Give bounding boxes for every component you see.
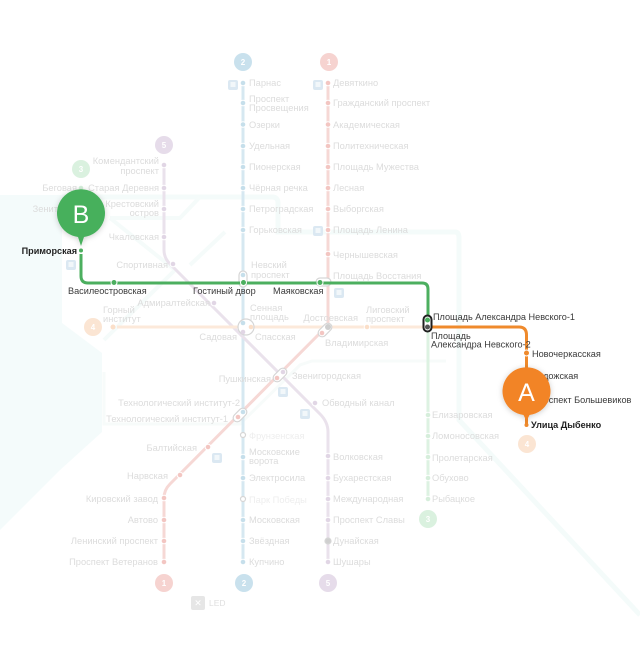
faded station labels: Чёрная речка [249, 183, 309, 193]
active station labels: Александра Невского-2 [431, 340, 531, 350]
faded station labels: Академическая [333, 120, 400, 130]
line number badges: 2 [242, 579, 247, 588]
faded station labels: Девяткино [333, 78, 378, 88]
faded station labels: Московские [249, 447, 300, 457]
faded station labels: Политехническая [333, 141, 409, 151]
faded station labels: Технологический институт-1 [106, 414, 228, 424]
faded station labels: Проспект [249, 94, 290, 104]
faded station labels: Выборгская [333, 204, 384, 214]
faded station labels: Московская [249, 515, 300, 525]
active station labels: Площадь Александра Невского-1 [433, 312, 575, 322]
line number badges [72, 53, 536, 592]
active station labels: Гостиный двор [193, 286, 256, 296]
active station labels: Проспект Большевиков [532, 395, 632, 405]
faded station labels: Нарвская [127, 471, 168, 481]
faded station labels: Адмиралтейская [137, 298, 210, 308]
faded station labels: Кировский завод [86, 494, 159, 504]
faded station labels: остров [130, 208, 159, 218]
active station labels: Ладожская [532, 371, 578, 381]
line 1 (red) [161, 80, 331, 565]
faded station labels: Обводный канал [322, 398, 395, 408]
faded station labels: Звёздная [249, 536, 290, 546]
faded station labels: Обухово [432, 473, 469, 483]
faded station labels: Лесная [333, 183, 364, 193]
route segment: orange [428, 327, 526, 425]
faded station labels: Площадь Восстания [333, 271, 421, 281]
faded station labels: площадь [250, 312, 289, 322]
active station labels: Площадь [431, 331, 471, 341]
faded station labels: Просвещения [249, 103, 309, 113]
active stations: dots [79, 248, 530, 427]
faded station labels: Удельная [249, 141, 290, 151]
faded station labels: Пионерская [249, 162, 301, 172]
background: water and rivers [0, 195, 640, 615]
line number badges: 4 [91, 323, 96, 332]
line number badges: 2 [241, 58, 246, 67]
line 5 (purple) [161, 162, 331, 565]
faded station labels: Проспект Славы [333, 515, 405, 525]
line number badges: 5 [326, 579, 331, 588]
line number badges: 3 [426, 515, 431, 524]
line number badges: 1 [327, 58, 332, 67]
active station labels: Новочеркасская [532, 349, 601, 359]
faded station labels: Балтийская [147, 443, 197, 453]
faded station labels: Достоевская [303, 313, 358, 323]
faded station labels: проспект [366, 314, 405, 324]
faded station labels: Площадь Мужества [333, 162, 420, 172]
faded station labels: Крестовский [105, 199, 159, 209]
faded station labels: Звенигородская [292, 371, 361, 381]
faded station labels: Волковская [333, 452, 383, 462]
line 3 (pale green) [78, 185, 431, 502]
faded station labels: Международная [333, 494, 403, 504]
faded station labels: Площадь Ленина [333, 225, 409, 235]
faded station labels: Озерки [249, 120, 280, 130]
faded station labels: Гражданский проспект [333, 98, 431, 108]
line number badges: 3 [79, 165, 84, 174]
faded station labels: Пушкинская [219, 374, 271, 384]
faded station labels: Владимирская [325, 338, 388, 348]
faded station labels: Чкаловская [109, 232, 159, 242]
active station labels: Приморская [22, 246, 77, 256]
line number badges: 1 [162, 579, 167, 588]
line 2 (blue) [240, 80, 246, 565]
active station labels: Улица Дыбенко [531, 420, 602, 430]
line 4 (pale orange) [110, 324, 428, 330]
airport icon: ✕ [194, 598, 202, 608]
pin A: end marker: A [518, 379, 535, 407]
faded station labels: Проспект Ветеранов [69, 557, 158, 567]
faded station labels: Лиговский [366, 305, 410, 315]
faded station labels: Сенная [250, 303, 282, 313]
faded station labels: Зенитская [33, 204, 77, 214]
faded station labels: Спортивная [116, 260, 168, 270]
railway station icons [66, 80, 344, 463]
faded station labels: Ломоносовская [432, 431, 499, 441]
airport icon: LED [209, 598, 226, 608]
faded station labels: Невский [251, 260, 287, 270]
faded station labels: ворота [249, 456, 279, 466]
faded station labels: Спасская [255, 332, 296, 342]
faded station labels: Садовая [199, 332, 237, 342]
faded station labels [33, 78, 499, 567]
faded station labels: Автово [128, 515, 158, 525]
pin B: start marker: B [73, 201, 89, 229]
line number badges: 4 [525, 440, 530, 449]
active station labels: Маяковская [273, 286, 323, 296]
faded station labels: Петроградская [249, 204, 313, 214]
faded station labels: Технологический институт-2 [118, 398, 240, 408]
active transfer: Ploshchad Aleksandra Nevskogo [424, 316, 432, 332]
faded station labels: Бухарестская [333, 473, 392, 483]
active station labels: Василеостровская [68, 286, 147, 296]
faded station labels: институт [103, 314, 141, 324]
faded station labels: Парнас [249, 78, 281, 88]
pin B: start marker [57, 189, 105, 246]
faded station labels: Горьковская [249, 225, 302, 235]
faded station labels: проспект [251, 270, 290, 280]
faded station labels: Рыбацкое [432, 494, 475, 504]
faded station labels: Дунайская [333, 536, 379, 546]
faded station labels: Фрунзенская [249, 431, 305, 441]
airport icon [191, 596, 226, 610]
faded station labels: Парк Победы [249, 495, 307, 505]
transfer nodes [232, 271, 333, 544]
faded station labels: Комендантский [93, 156, 159, 166]
faded station labels: Пролетарская [432, 453, 493, 463]
faded station labels: Ленинский проспект [71, 536, 159, 546]
faded station labels: Шушары [333, 557, 371, 567]
line number badges: 5 [162, 141, 167, 150]
active station labels [22, 246, 632, 430]
faded station labels: Елизаровская [432, 410, 493, 420]
faded station labels: Горный [103, 305, 135, 315]
route segment: green [81, 254, 428, 320]
faded station labels: проспект [120, 166, 160, 176]
faded station labels: Электросила [249, 473, 306, 483]
faded station labels: Старая Деревня [88, 183, 159, 193]
faded station labels: Беговая [42, 183, 77, 193]
faded station labels: Чернышевская [333, 250, 398, 260]
faded station labels: Купчино [249, 557, 284, 567]
pin A: end marker [502, 367, 550, 421]
